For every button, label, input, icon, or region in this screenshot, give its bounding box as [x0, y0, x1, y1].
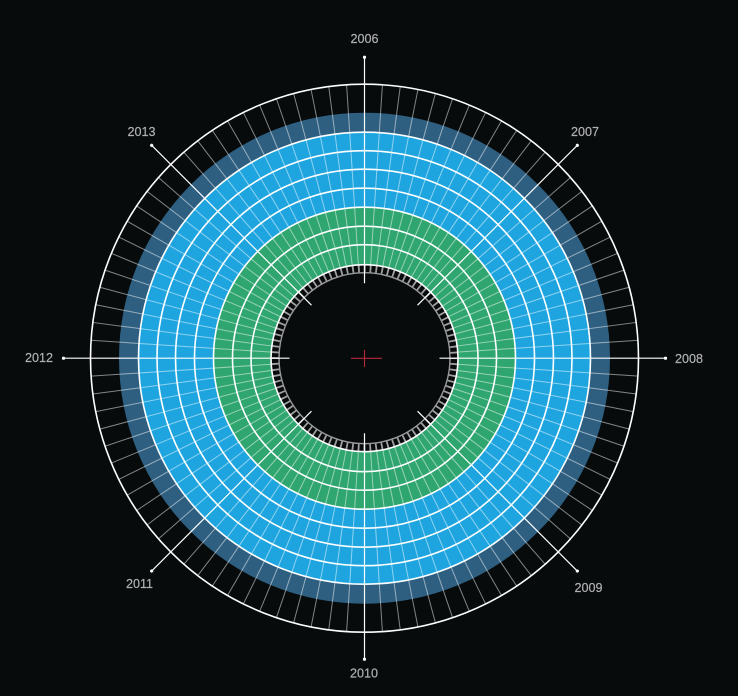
year labels: 2007 — [571, 125, 599, 139]
year labels: 2011 — [126, 577, 153, 591]
year labels: 2010 — [350, 666, 378, 680]
year labels: 2008 — [675, 352, 703, 366]
year axes with end dots — [62, 56, 667, 661]
year labels: 2013 — [127, 125, 156, 139]
band: dark blue outer ring — [119, 113, 610, 604]
band: inner dark ring — [271, 265, 458, 452]
year labels: 2012 — [25, 351, 53, 365]
inner ring gray ticks — [275, 269, 454, 448]
band: blue rings — [138, 132, 590, 584]
year labels: 2006 — [350, 32, 379, 46]
red centre crosshair — [351, 350, 382, 367]
band: green rings — [214, 207, 516, 509]
ring outlines — [90, 84, 638, 632]
monthly spokes — [91, 85, 638, 632]
year labels: 2009 — [574, 581, 603, 595]
inner ring gray edge — [279, 273, 450, 444]
